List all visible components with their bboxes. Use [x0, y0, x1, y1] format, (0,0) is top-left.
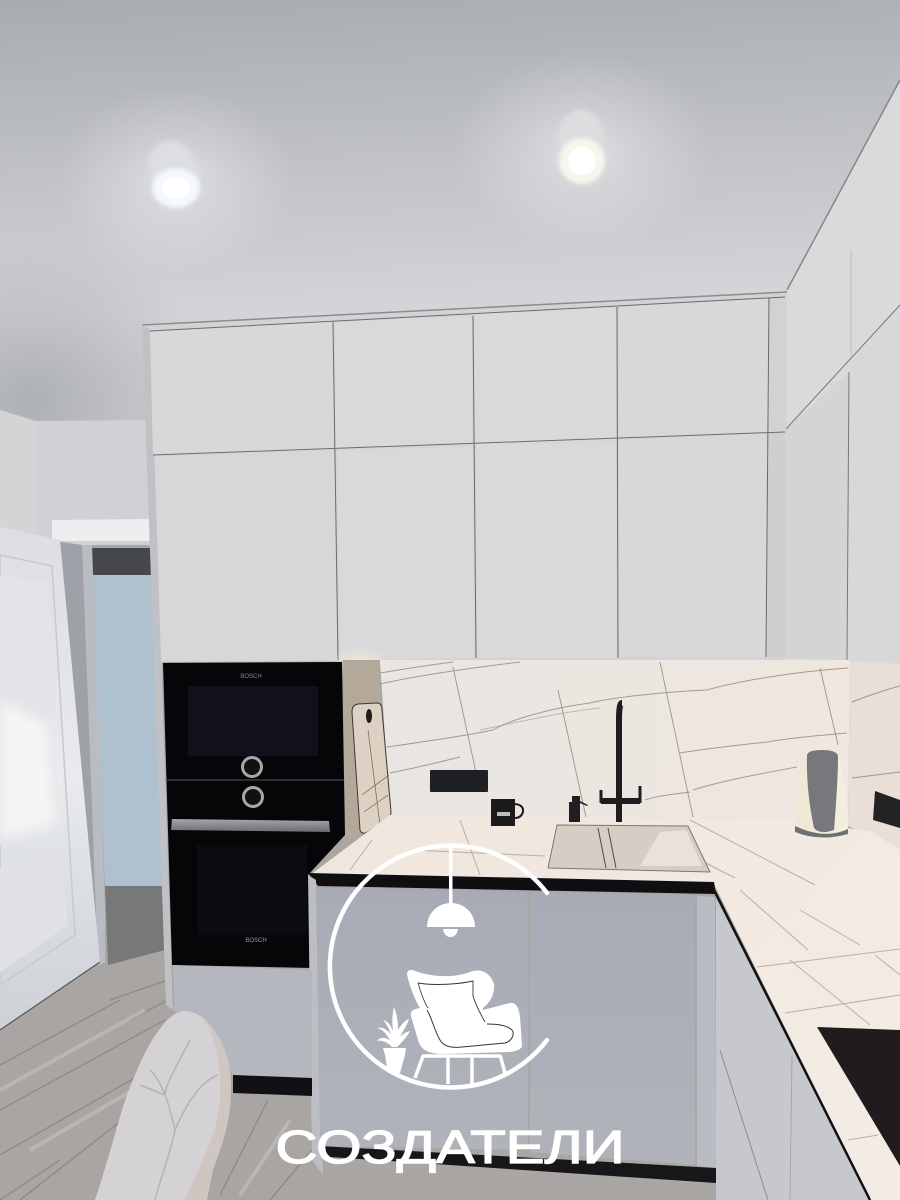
armchair: [407, 970, 522, 1084]
cooler recess beside oven: [343, 660, 380, 838]
open door: [0, 527, 100, 1030]
right side wall and upper cabinets: [785, 80, 900, 665]
ceiling: [0, 0, 900, 560]
cooktop: [817, 1027, 900, 1166]
soap dispenser: [569, 796, 588, 822]
lower cabinets: [308, 875, 870, 1200]
kettle: [795, 750, 848, 838]
dining chair: [95, 1011, 231, 1200]
built-in ovens: [163, 662, 345, 968]
upper cabinets: [142, 292, 787, 1010]
ceiling lamp right: [558, 110, 605, 184]
cutting board: [352, 703, 391, 833]
logo: [276, 846, 624, 1173]
marble backsplash: [330, 647, 900, 852]
built-in ovens: BOSCH: [245, 938, 267, 944]
floor: [0, 886, 720, 1200]
left wall and doorway: [0, 410, 172, 970]
black mug: [491, 799, 523, 826]
lower cabinet under ovens: [173, 965, 312, 1096]
potted plant: [377, 1007, 410, 1073]
countertop: [310, 815, 900, 1200]
wall socket: [430, 770, 488, 792]
counter black edge: [308, 873, 716, 894]
right socket: [873, 791, 900, 828]
built-in ovens: BOSCH: [240, 674, 262, 680]
logo ring: [330, 846, 547, 1088]
faucet: [601, 703, 640, 822]
brand name: СОЗДАТЕЛИ: [276, 1121, 624, 1173]
pendant lamp: [427, 846, 475, 937]
ceiling lamp left: [140, 133, 208, 208]
sink: [548, 825, 710, 872]
